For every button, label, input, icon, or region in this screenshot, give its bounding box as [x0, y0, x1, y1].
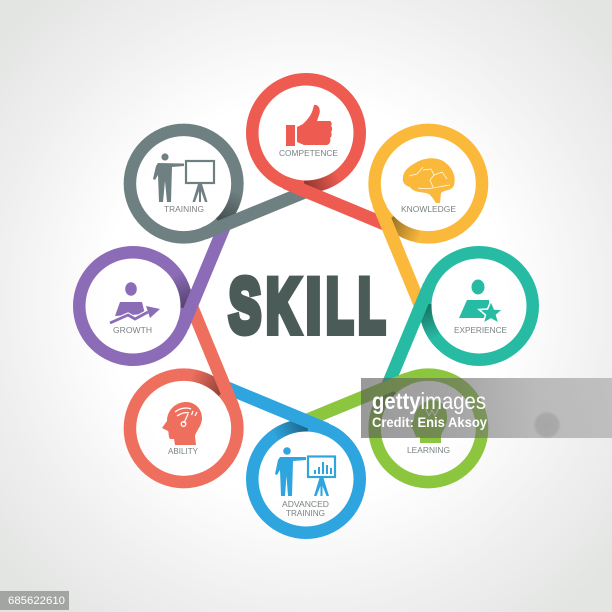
- icon: presenter with chart board: [275, 447, 335, 496]
- watermark band: gettyimages: [372, 388, 486, 414]
- label: learning: LEARNING: [407, 445, 450, 455]
- ring: experience: [387, 252, 533, 387]
- icon: person with star: [459, 280, 503, 324]
- icon: presenter with board: [153, 153, 214, 202]
- icon: brain: [403, 158, 455, 203]
- ring: growth: [79, 225, 225, 360]
- label: competence: COMPETENCE: [279, 148, 338, 158]
- watermark band: Credit: Enis Aksoy: [372, 414, 487, 430]
- title: L: [358, 264, 385, 349]
- title: I: [306, 264, 321, 349]
- label: advanced training: [282, 499, 329, 518]
- label: advanced training: ADVANCED: [282, 499, 329, 509]
- ring: competence: [252, 79, 387, 225]
- label: ability: ABILITY: [168, 446, 198, 456]
- watermark band: [361, 378, 612, 439]
- title: [229, 264, 385, 349]
- icon: head with book: [410, 400, 447, 443]
- ring: training: [108, 88, 306, 287]
- icon: thumbs up: [286, 105, 332, 146]
- label: growth: GROWTH: [113, 325, 152, 335]
- title: S: [229, 264, 261, 349]
- label: knowledge: KNOWLEDGE: [401, 204, 456, 214]
- label: experience: EXPERIENCE: [454, 325, 507, 335]
- ring: ability: [88, 306, 287, 504]
- ring: advanced training: [225, 387, 360, 533]
- image id tag: 685622610: [8, 595, 65, 607]
- knowledge tail overlap: [378, 204, 396, 246]
- image id tag: [0, 591, 69, 610]
- label: training: TRAINING: [164, 204, 204, 214]
- title: L: [326, 264, 353, 349]
- ring: knowledge: [325, 108, 524, 306]
- ring: learning: [306, 325, 504, 524]
- icon: head with gauge: [162, 402, 202, 445]
- title: K: [266, 264, 300, 349]
- label: advanced training: TRAINING: [286, 508, 325, 518]
- icon: person with growth arrow: [110, 282, 160, 323]
